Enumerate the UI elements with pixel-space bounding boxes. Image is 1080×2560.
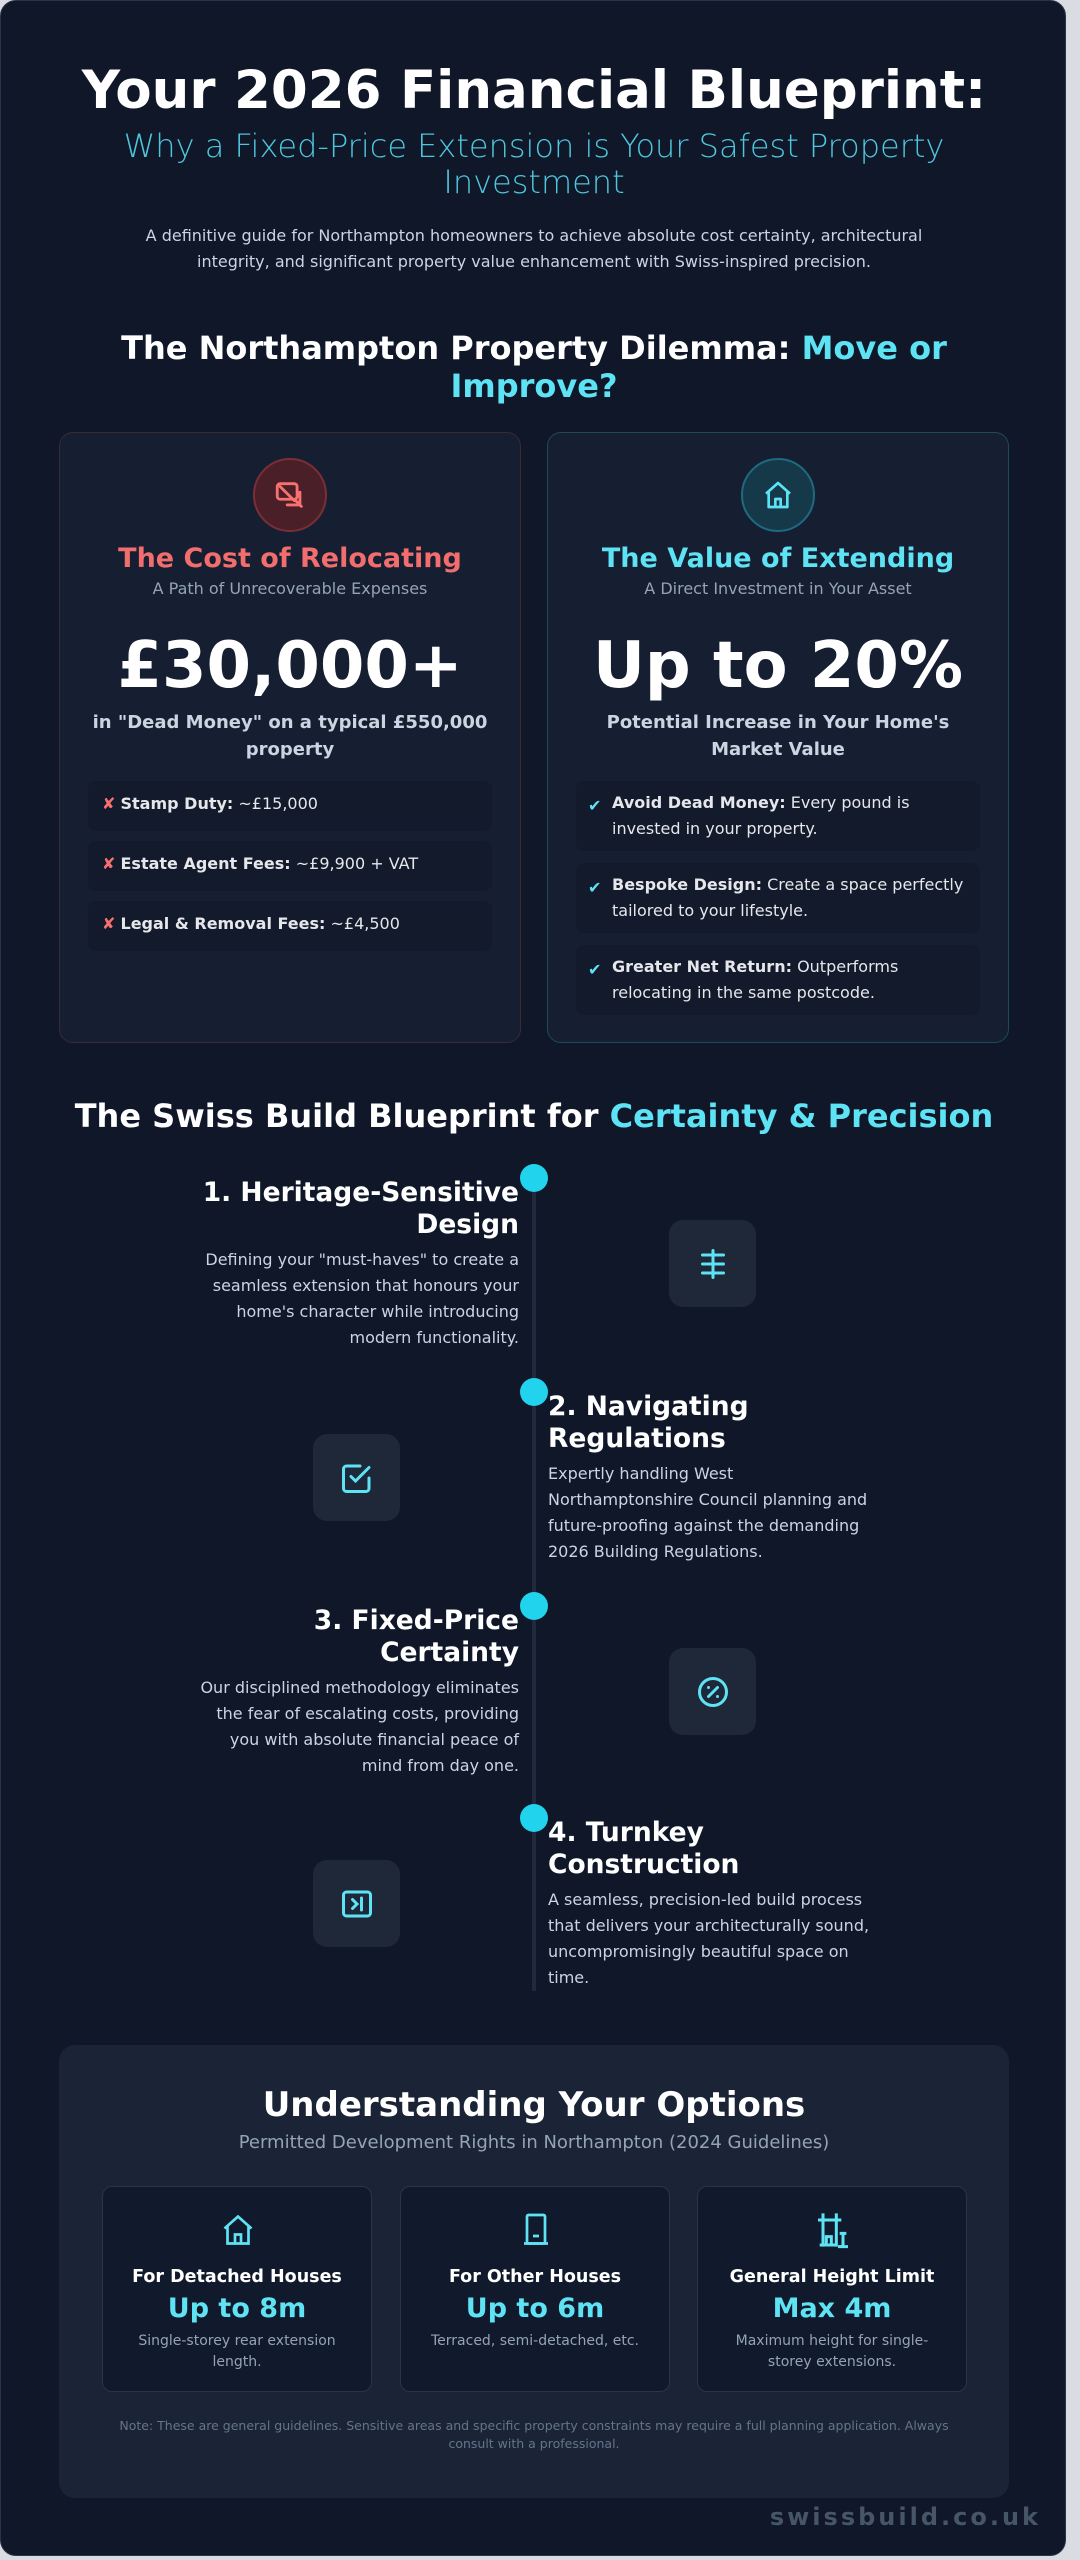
icon: relocating — [253, 458, 327, 532]
step 2 — [313, 1378, 867, 1561]
cost list — [102, 794, 418, 933]
card title: The Cost of Relocating — [118, 543, 462, 574]
heading: blueprint: The Swiss Build Blueprint for Certainty & Precision — [75, 1097, 993, 1135]
option: other: For Other Houses — [449, 2267, 621, 2287]
cost list: ✘ Legal & Removal Fees: ~£4,500 — [102, 914, 400, 933]
timeline — [200, 1164, 869, 1991]
option: other — [400, 2186, 670, 2392]
benefit list: ✔ — [588, 796, 601, 815]
big number: £30,000+ — [117, 629, 463, 703]
panel: cost of relocating: A Path of Unrecoverable Expenses — [153, 579, 427, 598]
step 1: 1. Heritage-Sensitive Design — [203, 1177, 519, 1240]
option: height: General Height Limit — [730, 2267, 934, 2287]
icon: price — [669, 1648, 756, 1735]
option: detached: Single-storey rear extension length. — [138, 2333, 336, 2370]
step 1 — [203, 1164, 756, 1347]
icon: house — [741, 458, 815, 532]
step 3 — [200, 1592, 756, 1775]
panel: value of extending: Potential Increase in Your Home's Market Value — [607, 712, 949, 760]
heading: dilemma: The Northampton Property Dilemma: Move or Improve? — [121, 329, 947, 405]
big number: Up to 20% — [593, 629, 963, 703]
option: other: Terraced, semi-detached, etc. — [431, 2333, 639, 2349]
panel: value of extending: A Direct Investment in Your Asset — [644, 579, 912, 598]
benefit list: Greater Net Return: Outperforms relocating in the same postcode. — [612, 957, 898, 1002]
benefit list: Bespoke Design: Create a space perfectly tailored to your lifestyle. — [612, 875, 963, 920]
benefit list: Avoid Dead Money: Every pound is invested in your property. — [612, 793, 910, 838]
step 4: 4. Turnkey Construction — [548, 1817, 739, 1880]
panel: understanding your options: Permitted Development Rights in Northampton (2024 Guidelines) — [239, 2132, 829, 2153]
option: detached: For Detached Houses — [132, 2267, 342, 2287]
benefit list — [588, 793, 963, 1002]
icon: checklist — [313, 1434, 400, 1521]
step 4 — [313, 1804, 869, 1987]
option: other: Up to 6m — [466, 2293, 604, 2324]
option: height: Max 4m — [773, 2293, 891, 2324]
intro text: A definitive guide for Northampton homeowners to achieve absolute cost certainty, architectural integrity, and significant property value enhancement with Swiss-inspired precision. — [146, 226, 922, 271]
benefit list: ✔ — [588, 878, 601, 897]
options title: Understanding Your Options — [263, 2085, 805, 2125]
subtitle: Why a Fixed-Price Extension is Your Safest Property Investment — [124, 127, 944, 201]
cost list: ✘ Stamp Duty: ~£15,000 — [102, 794, 318, 813]
panel: cost of relocating — [59, 432, 521, 1043]
panel: cost of relocating: in "Dead Money" on a typical £550,000 property — [93, 712, 487, 760]
option: detached: Up to 8m — [168, 2293, 306, 2324]
cost list: ✘ Estate Agent Fees: ~£9,900 + VAT — [102, 854, 418, 873]
step 2: Expertly handling West Northamptonshire Council planning and future-proofing against the demanding 2026 Building Regulations. — [548, 1464, 867, 1561]
note: Note: These are general guidelines. Sensitive areas and specific property constraints may require a full planning application. Always consult with a professional. — [119, 2418, 949, 2451]
step 4: A seamless, precision-led build process that delivers your architecturally sound, uncompromisingly beautiful space on time. — [548, 1890, 869, 1987]
panel: understanding your options — [59, 2045, 1009, 2498]
step 3: 3. Fixed-Price Certainty — [314, 1605, 519, 1668]
option: height — [697, 2186, 967, 2392]
option: height: Maximum height for single-storey extensions. — [736, 2333, 928, 2370]
option: detached — [102, 2186, 372, 2392]
card title: The Value of Extending — [602, 543, 954, 574]
step 3: Our disciplined methodology eliminates the fear of escalating costs, providing you with absolute financial peace of mind from day one. — [200, 1678, 519, 1775]
step 2: 2. Navigating Regulations — [548, 1391, 749, 1454]
icon: turnkey — [313, 1860, 400, 1947]
step 1: Defining your "must-haves" to create a seamless extension that honours your home's character while introducing modern functionality. — [205, 1250, 519, 1347]
benefit list: ✔ — [588, 960, 601, 979]
panel: value of extending — [547, 432, 1009, 1043]
title: Your 2026 Financial Blueprint: — [82, 60, 986, 121]
icon: design — [669, 1220, 756, 1307]
footer brand: swissbuild.co.uk — [770, 2503, 1041, 2531]
